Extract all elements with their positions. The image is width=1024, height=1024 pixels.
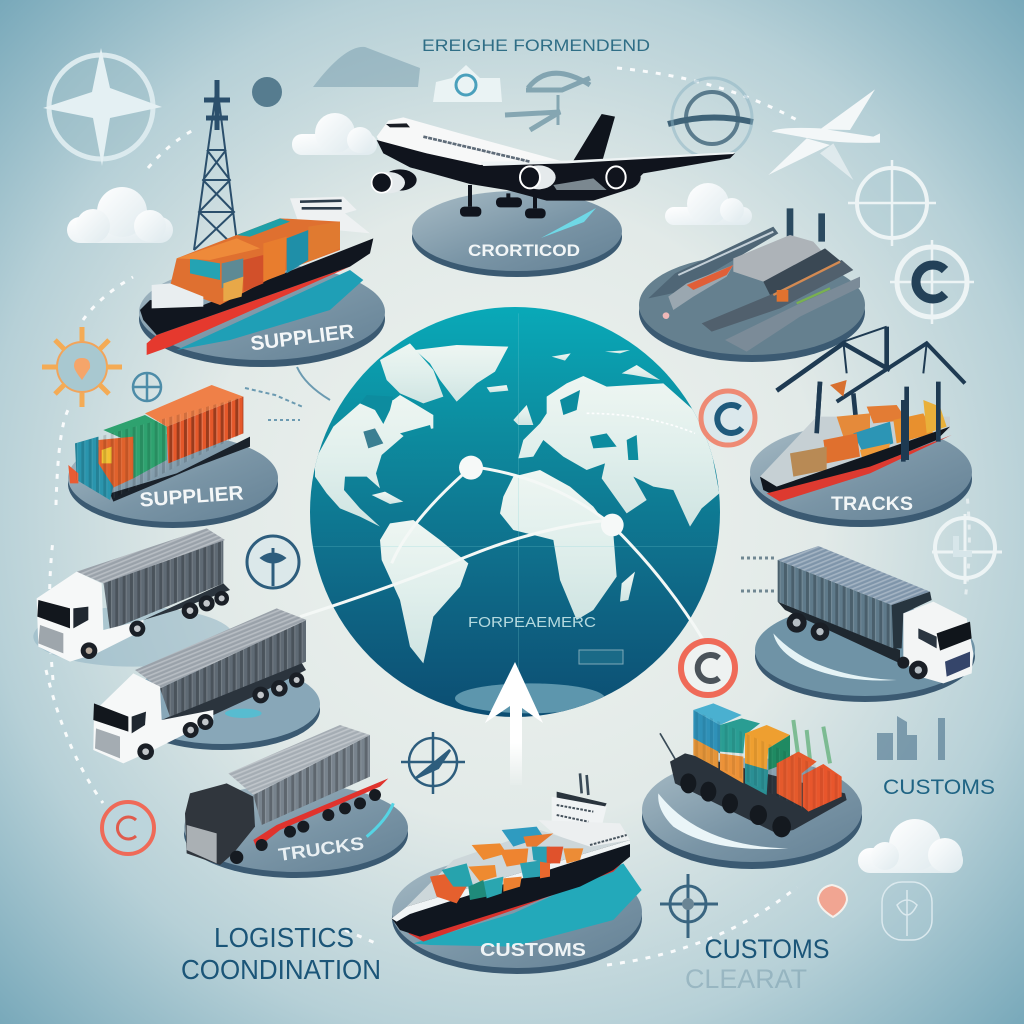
dark truck	[185, 725, 393, 865]
cargo ship with supplier disc	[139, 197, 385, 367]
panel: airplane disc	[412, 191, 622, 277]
truck 2	[93, 608, 320, 763]
truck right	[755, 546, 975, 702]
disc label: SUPPLIER	[139, 482, 245, 512]
icon: left propeller	[247, 536, 299, 588]
loaded trailer	[658, 703, 847, 849]
multicolour container trailer	[68, 385, 250, 502]
icon: faint emblem	[505, 73, 590, 130]
truck 3	[184, 725, 408, 878]
icon: faint brain	[133, 373, 161, 401]
container truck with supplier disc	[68, 385, 278, 528]
truck 1	[33, 528, 233, 667]
panel: port disc	[750, 424, 972, 527]
icon: radio tower	[194, 80, 238, 250]
icon: dark blob	[252, 77, 282, 107]
customs clearance heading: CUSTOMS	[704, 934, 830, 964]
icon: compass top left	[43, 48, 162, 166]
disc label: CRORTICOD	[468, 241, 580, 260]
white truck facing right	[773, 546, 973, 683]
panel: ship disc	[139, 264, 385, 367]
faint note marks	[245, 367, 330, 420]
panel: truck 2 disc	[124, 664, 320, 750]
globe continents	[310, 313, 721, 713]
clouds	[67, 113, 963, 873]
disc label: SUPPLIER	[249, 321, 356, 355]
panel: warehouse disc	[639, 255, 865, 362]
panel: container disc	[68, 434, 278, 528]
route lines and nodes	[300, 456, 703, 640]
up arrow	[485, 662, 543, 785]
icon: red C badge globe edge	[681, 641, 735, 695]
panel: truck 3 disc	[184, 784, 408, 878]
panel: trailer disc	[642, 758, 862, 869]
icon: C target right	[890, 240, 974, 324]
logistics coordination heading	[181, 922, 381, 985]
icon: small target bottom right	[660, 874, 718, 938]
bottom container ship	[392, 773, 642, 947]
cloud bottom right	[858, 819, 963, 873]
panel: bottom ship disc	[392, 856, 642, 974]
globe	[300, 307, 721, 717]
white truck	[93, 608, 307, 763]
icon: orange sun	[42, 327, 122, 407]
dashed route ring	[46, 68, 969, 965]
icon: white plane top right	[768, 89, 880, 180]
customs label right: CUSTOMS	[883, 776, 995, 799]
container trailer lower right	[642, 703, 862, 869]
icon: crosshair right	[932, 514, 1002, 584]
icon: red pin	[818, 885, 847, 917]
disc label: TRUCKS	[277, 833, 365, 865]
small note dashes	[741, 558, 777, 591]
logistics coordination heading: LOGISTICS	[214, 922, 354, 953]
airplane section	[372, 114, 735, 277]
customs clearance heading	[685, 934, 830, 994]
faint art cluster	[313, 47, 420, 87]
customs clearance heading: CLEARAT	[685, 964, 807, 994]
icon: pale banner	[433, 65, 502, 102]
icon: red C badge lower left	[102, 802, 154, 854]
cloud top	[292, 113, 377, 155]
port cranes and ship, tracks disc	[750, 327, 972, 527]
port cranes and container ship	[760, 327, 965, 502]
disc label: TRACKS	[831, 494, 913, 515]
globe label: FORPEAEMERC	[468, 614, 596, 631]
truck group left	[33, 528, 233, 667]
icon: red C badge center right	[701, 391, 755, 445]
icon: target rings right	[848, 160, 936, 246]
faint badge	[882, 882, 932, 940]
panel: right truck disc	[755, 604, 975, 702]
header label: EREIGHE FORMENDEND	[422, 36, 650, 55]
customs faint icons	[877, 716, 945, 760]
container ship	[140, 197, 373, 355]
ship bottom center	[392, 773, 642, 974]
icon: dark ring cross	[668, 78, 753, 158]
icon: mini compass	[401, 732, 465, 794]
faint top icons	[252, 47, 753, 158]
cloud right	[665, 183, 752, 225]
cloud left	[67, 187, 173, 243]
port terminal model	[648, 208, 860, 352]
disc label: CUSTOMS	[480, 940, 586, 960]
logistics coordination heading: COONDINATION	[181, 954, 381, 985]
warehouse section	[639, 208, 865, 362]
icon: airplane	[372, 114, 735, 218]
